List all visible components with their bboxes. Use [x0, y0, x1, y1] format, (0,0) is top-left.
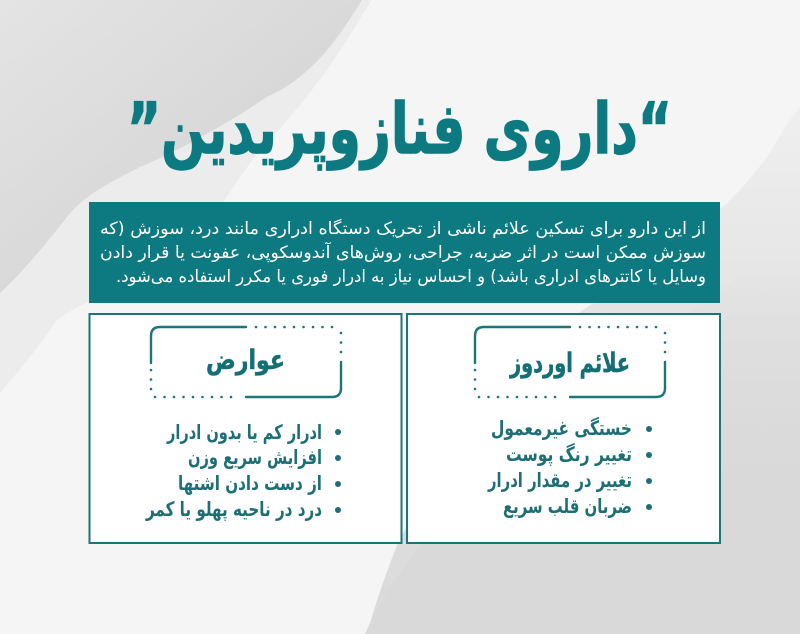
- intro text: [100, 218, 706, 287]
- list: overdose symptoms: تغییر رنگ پوست: [506, 442, 632, 467]
- list: overdose symptoms: [487, 416, 652, 518]
- list: side effects: درد در ناحیه پهلو یا کمر: [145, 497, 322, 522]
- heading frame: overdose symptoms: [475, 327, 665, 397]
- heading: side effects: عوارض: [206, 345, 285, 376]
- panel: overdose symptoms: [407, 314, 720, 543]
- list: side effects: از دست دادن اشتها: [178, 471, 322, 495]
- panel: side effects: [90, 314, 402, 543]
- panel: intro description: [89, 202, 720, 303]
- list: side effects: ادرار کم یا بدون ادرار: [166, 420, 322, 444]
- list: overdose symptoms: خستگی غیرمعمول: [491, 416, 632, 440]
- heading frame: side effects: [151, 327, 341, 397]
- intro text: سوزش ممکن است در اثر ضربه، جراحی، روش‌های آندوسکوپی، عفونت یا قرار دادن: [100, 241, 706, 263]
- list: side effects: افزایش سریع وزن: [188, 445, 322, 469]
- list: overdose symptoms: تغییر در مقدار ادرار: [487, 468, 632, 492]
- intro text: وسایل یا کاتترهای ادراری باشد) و احساس نیاز به ادرار فوری یا مکرر استفاده می‌شود.: [116, 267, 706, 287]
- list: side effects: [145, 420, 341, 522]
- heading: overdose symptoms: علائم اوردوز: [509, 348, 630, 379]
- intro text: از این دارو برای تسکین علائم ناشی از تحریک دستگاه ادراری مانند درد، سوزش (که: [100, 218, 706, 239]
- list: overdose symptoms: ضربان قلب سریع: [503, 494, 632, 518]
